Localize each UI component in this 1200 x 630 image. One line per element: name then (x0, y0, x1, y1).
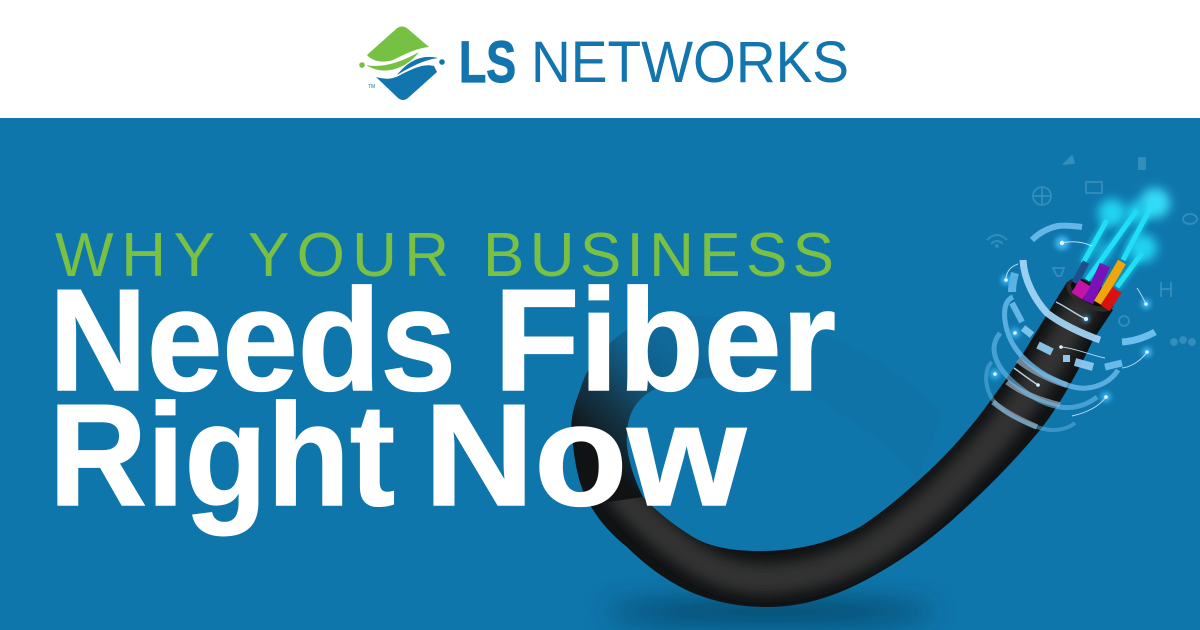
wordmark LS: LS (459, 30, 516, 95)
icon: green dot (359, 62, 365, 68)
icon: blue dot (439, 59, 445, 65)
icon: green upper diamond (367, 26, 429, 62)
wordmark NETWORKS: NETWORKS (531, 30, 849, 95)
faint network icons (987, 156, 1197, 345)
icon: cart (1053, 268, 1064, 276)
fiber cable illustration (570, 156, 1197, 623)
white header band (0, 0, 1200, 118)
light nodes (990, 236, 1152, 416)
heading: eyebrow: WHY (55, 221, 215, 290)
heading: main title: Right (49, 374, 395, 536)
trademark mark: TM (368, 84, 375, 90)
heading: eyebrow: YOUR (248, 221, 449, 290)
icon: at sign (1119, 316, 1129, 326)
icon: picture card (1086, 182, 1102, 193)
heading: main title: Needs (49, 259, 456, 421)
light rings around cable (986, 226, 1155, 430)
icon: thumbs (1064, 156, 1074, 164)
icon: green wave (366, 52, 419, 71)
strand glow tips (1092, 188, 1170, 262)
logo: LS Networks (359, 26, 849, 100)
cable back loop, fading (571, 316, 943, 505)
red tube (1105, 290, 1117, 308)
cable floor shadow (605, 601, 935, 623)
strand glow (1083, 203, 1153, 287)
cable front body (590, 282, 1113, 607)
icon: chat (1183, 214, 1197, 224)
magenta tube (1077, 283, 1085, 296)
cable banded rings on jacket (993, 360, 1067, 427)
navy tube (1075, 262, 1086, 283)
heading: eyebrow (55, 221, 834, 290)
icon: blue wave (397, 57, 438, 75)
icon: building (1161, 282, 1171, 297)
icon: globe (1033, 187, 1051, 205)
fiber strands (1075, 203, 1153, 308)
heading: main title (49, 259, 836, 536)
icon: people (1171, 337, 1195, 345)
bright strands (1083, 203, 1153, 287)
icon: blue lower diamond (376, 65, 437, 100)
purple tube (1088, 265, 1105, 302)
heading: main title: Now (424, 374, 747, 536)
icon: wifi (987, 235, 1007, 247)
heading: eyebrow: BUSINESS (483, 221, 834, 290)
heading: main title: Fiber (494, 259, 836, 421)
cable top cap (1061, 271, 1119, 319)
icon: bottle (1139, 158, 1145, 169)
gold tube (1098, 262, 1122, 303)
